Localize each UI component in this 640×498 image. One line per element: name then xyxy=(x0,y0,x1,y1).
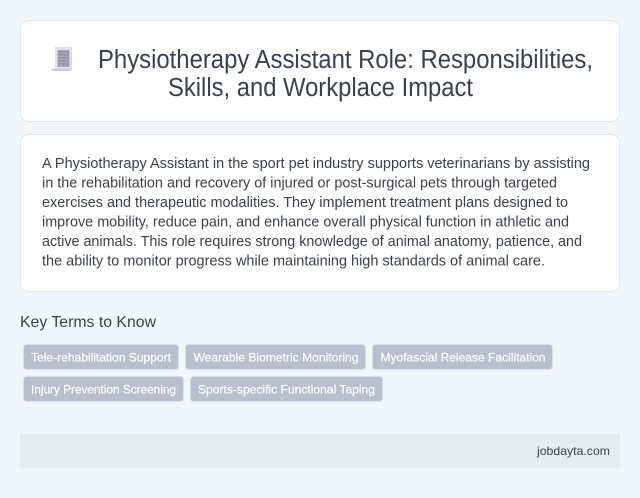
footer xyxy=(20,434,620,468)
tag: sports-specific: Sports-specific Functional Taping xyxy=(198,382,375,396)
tag: wearable biometric xyxy=(186,344,366,370)
tag: injury prevention: Injury Prevention Screening xyxy=(31,382,176,396)
text block: description xyxy=(42,156,590,270)
text block: description: A Physiotherapy Assistant in the sport pet industry supports veterinarians by assisting xyxy=(42,156,590,172)
title: Physiotherapy Assistant Role: Responsibilities, xyxy=(98,46,593,74)
text block: description: improve mobility, reduce pain, and enhance overall physical function in athletic and xyxy=(42,214,569,230)
tag: tele-rehabilitation xyxy=(24,344,178,370)
tag: myofascial release xyxy=(372,344,552,370)
title xyxy=(98,46,593,102)
tag: wearable biometric: Wearable Biometric Monitoring xyxy=(194,350,358,364)
title: Skills, and Workplace Impact xyxy=(168,74,473,102)
panel: description xyxy=(20,134,620,292)
text block: description: exercises and therapeutic modalities. They implement treatment plans designed to xyxy=(42,195,568,211)
text block: description: the ability to monitor progress while maintaining high standards of animal care. xyxy=(42,254,545,270)
tag: tele-rehabilitation: Tele-rehabilitation Support xyxy=(31,350,172,364)
text block: description: active animals. This role requires strong knowledge of animal anatomy, patience, and xyxy=(42,234,582,250)
footer source: jobdayta.com xyxy=(536,444,610,458)
tag: sports-specific xyxy=(190,376,382,402)
panel: title card xyxy=(20,20,620,122)
tag: myofascial release: Myofascial Release Facilitation xyxy=(380,350,546,364)
text block: description: in the rehabilitation and recovery of injured or post-surgical pets through targeted xyxy=(42,176,557,192)
tags: key terms xyxy=(24,344,552,402)
tag: injury prevention xyxy=(24,376,184,402)
icon: document scroll xyxy=(51,47,72,71)
heading: key terms: Key Terms to Know xyxy=(20,314,156,331)
